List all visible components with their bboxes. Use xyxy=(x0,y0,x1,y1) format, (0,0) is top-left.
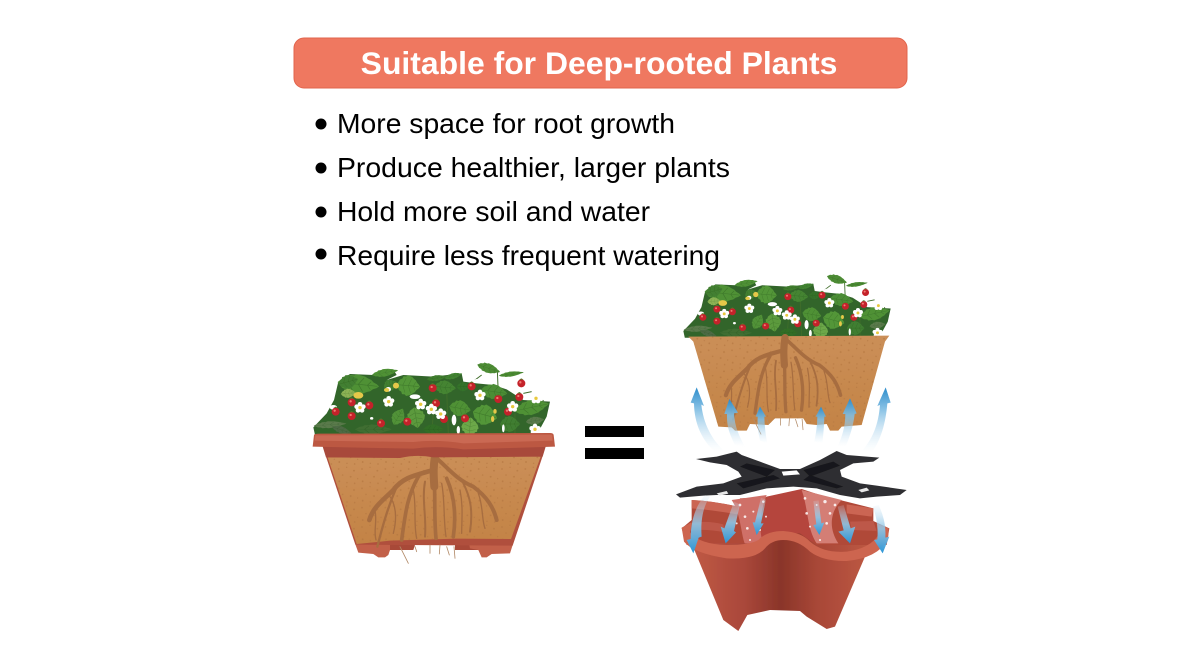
bullet list xyxy=(316,108,730,271)
equals sign xyxy=(585,426,644,459)
bullet 2: Produce healthier, larger plants xyxy=(337,152,730,183)
left planter: single deep pot with plant xyxy=(313,360,555,563)
strawberry plant xyxy=(313,360,550,437)
upper pot with soil and roots xyxy=(688,336,889,434)
header banner xyxy=(294,38,907,88)
bullet 3: Hold more soil and water xyxy=(337,196,650,227)
black connector tray xyxy=(676,451,907,498)
lower pot xyxy=(682,489,889,631)
banner title: Suitable for Deep-rooted Plants xyxy=(361,45,837,81)
top strawberry plant xyxy=(683,272,891,339)
bullet 1: More space for root growth xyxy=(337,108,675,139)
downward water arrows xyxy=(687,495,889,553)
upward airflow arrows xyxy=(691,387,891,452)
bullet 4: Require less frequent watering xyxy=(337,240,720,271)
pot with cutaway soil and roots xyxy=(313,433,555,563)
right stacked planter: exploded view xyxy=(676,272,907,631)
